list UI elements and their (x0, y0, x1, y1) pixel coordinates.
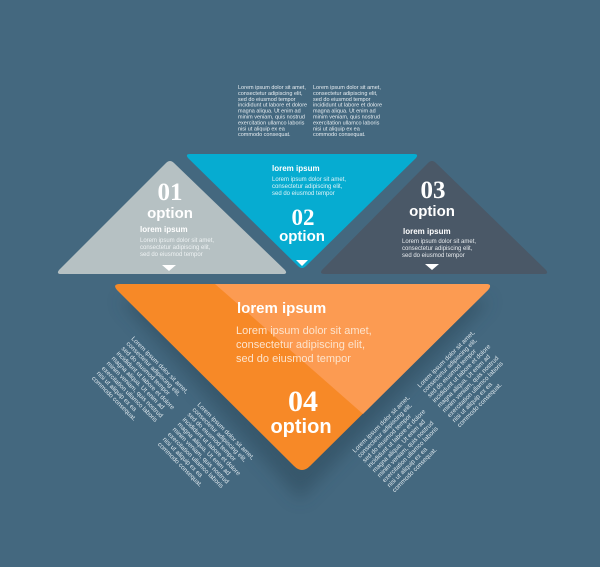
panel: option 02 triangle: sed do eiusmod tempor (272, 191, 335, 197)
panel: option 04 triangle: sed do eiusmod tempor (236, 353, 351, 365)
rotated text left 2: nisi ut aliquip ex ea (161, 436, 204, 479)
rotated text right 1: exercitation ullamco laboris (446, 360, 505, 419)
rotated text right 2: incididunt ut labore et dolore (366, 408, 428, 469)
top text block right: incididunt ut labore et dolore (313, 103, 382, 109)
rotated text right 1: consectetur adipiscing elit, (421, 337, 479, 394)
rotated text right 1: minim veniam, quis nostrud (441, 355, 501, 414)
rotated text right 1: commodo consequat. (456, 381, 504, 429)
rotated text left 1: nisi ut aliquip ex ea (95, 370, 138, 413)
rotated text right 2: consectetur adipiscing elit, (356, 402, 414, 459)
panel: option 03 triangle: consectetur adipiscing elit, (402, 246, 473, 252)
panel: option 02 triangle: consectetur adipiscing elit, (272, 184, 343, 190)
rotated text right 2: Lorem ipsum dolor sit amet, (351, 394, 412, 454)
panel: option 03 triangle: lorem ipsum (403, 227, 451, 236)
top text block right: nisi ut aliquip ex ea (313, 126, 361, 132)
rotated text right 2: exercitation ullamco laboris (381, 425, 440, 484)
rotated text left 1: minim veniam, quis nostrud (105, 360, 164, 420)
panel: option 04 triangle: Lorem ipsum dolor sit amet, (236, 325, 372, 337)
panel: option 01 triangle: lorem ipsum (140, 225, 188, 234)
top text block left: incididunt ut labore et dolore (238, 103, 307, 109)
rotated text left 1: exercitation ullamco laboris (100, 365, 159, 424)
rotated text right 1: incididunt ut labore et dolore (431, 343, 493, 404)
rotated text right 1: sed do eiusmod tempor (426, 348, 478, 399)
top text block right: sed do eiusmod tempor (313, 97, 371, 103)
rotated text right 2: nisi ut aliquip ex ea (386, 446, 429, 489)
panel: option 01 triangle: consectetur adipiscing elit, (140, 245, 211, 251)
rotated text left 2: consectetur adipiscing elit, (191, 406, 248, 464)
panel: option 04 triangle: lorem ipsum (237, 300, 326, 317)
rotated text left 1: magna aliqua. Ut enim ad (110, 355, 166, 411)
panel: option 04 triangle: consectetur adipiscing elit, (236, 339, 365, 351)
panel: option 04 triangle: 04 (288, 385, 318, 418)
panel: option 02 triangle (187, 154, 417, 268)
top text block right: minim veniam, quis nostrud (313, 114, 380, 120)
panel: option 01 triangle: 01 (158, 179, 182, 206)
panel: option 03 triangle: Lorem ipsum dolor sit amet, (402, 239, 476, 245)
panel: option 03 triangle: 03 (420, 177, 446, 204)
rotated text left 1: commodo consequat. (90, 375, 138, 423)
top text block right: commodo consequat. (313, 132, 366, 138)
top text block left: exercitation ullamco laboris (238, 120, 305, 126)
panel: option 01 triangle: sed do eiusmod tempor (140, 252, 203, 258)
top text block right: exercitation ullamco laboris (313, 120, 380, 126)
panel: option 04 triangle: option (270, 416, 332, 438)
panel: option 02 triangle: 02 (292, 205, 314, 230)
top text block left: nisi ut aliquip ex ea (238, 126, 286, 132)
panel: option 03 triangle (321, 161, 547, 274)
top text block left: Lorem ipsum dolor sit amet, (238, 85, 306, 91)
rotated text right 1: magna aliqua. Ut enim ad (436, 353, 492, 409)
panel: option 01 triangle (58, 161, 286, 274)
rotated text left 2: exercitation ullamco laboris (166, 431, 225, 490)
rotated text right 2: commodo consequat. (391, 446, 439, 494)
rotated text right 1: nisi ut aliquip ex ea (451, 381, 494, 424)
panel: option 01 triangle: Lorem ipsum dolor sit amet, (140, 238, 214, 244)
top text block left: magna aliqua. Ut enim ad (238, 109, 301, 115)
rotated text left 1: sed do eiusmod tempor (120, 345, 171, 397)
panel: option 03 triangle: sed do eiusmod tempor (402, 253, 465, 259)
rotated text right 2: minim veniam, quis nostrud (376, 420, 436, 479)
rotated text left 2: magna aliqua. Ut enim ad (176, 421, 232, 477)
top text block left: minim veniam, quis nostrud (238, 114, 305, 120)
panel: option 03 triangle: option (409, 203, 455, 220)
rotated text right 1: Lorem ipsum dolor sit amet, (416, 329, 477, 389)
panel: option 02 triangle: Lorem ipsum dolor sit amet, (272, 177, 346, 183)
rotated text left 2: Lorem ipsum dolor sit amet, (196, 401, 256, 462)
rotated text right 2: sed do eiusmod tempor (361, 413, 413, 464)
rotated text left 2: sed do eiusmod tempor (186, 411, 237, 463)
top text block right: magna aliqua. Ut enim ad (313, 109, 376, 115)
top text block right: Lorem ipsum dolor sit amet, (313, 85, 381, 91)
panel: option 02 triangle: lorem ipsum (272, 164, 320, 173)
rotated text left 1: Lorem ipsum dolor sit amet, (130, 335, 190, 396)
rotated text left 1: consectetur adipiscing elit, (125, 340, 182, 398)
panel: option 02 triangle: option (279, 228, 325, 245)
rotated text right 2: magna aliqua. Ut enim ad (371, 418, 427, 474)
panel: option 04 triangle (115, 284, 490, 470)
panel: option 01 triangle: option (147, 205, 193, 222)
top text block right: consectetur adipiscing elit, (313, 91, 378, 97)
top text block left: consectetur adipiscing elit, (238, 91, 303, 97)
rotated text left 2: minim veniam, quis nostrud (171, 426, 230, 486)
rotated text left 2: commodo consequat. (156, 441, 204, 489)
rotated text left 1: incididunt ut labore et dolore (115, 350, 176, 412)
top text block left: commodo consequat. (238, 132, 291, 138)
top text block left: sed do eiusmod tempor (238, 97, 296, 103)
rotated text left 2: incididunt ut labore et dolore (181, 416, 242, 478)
